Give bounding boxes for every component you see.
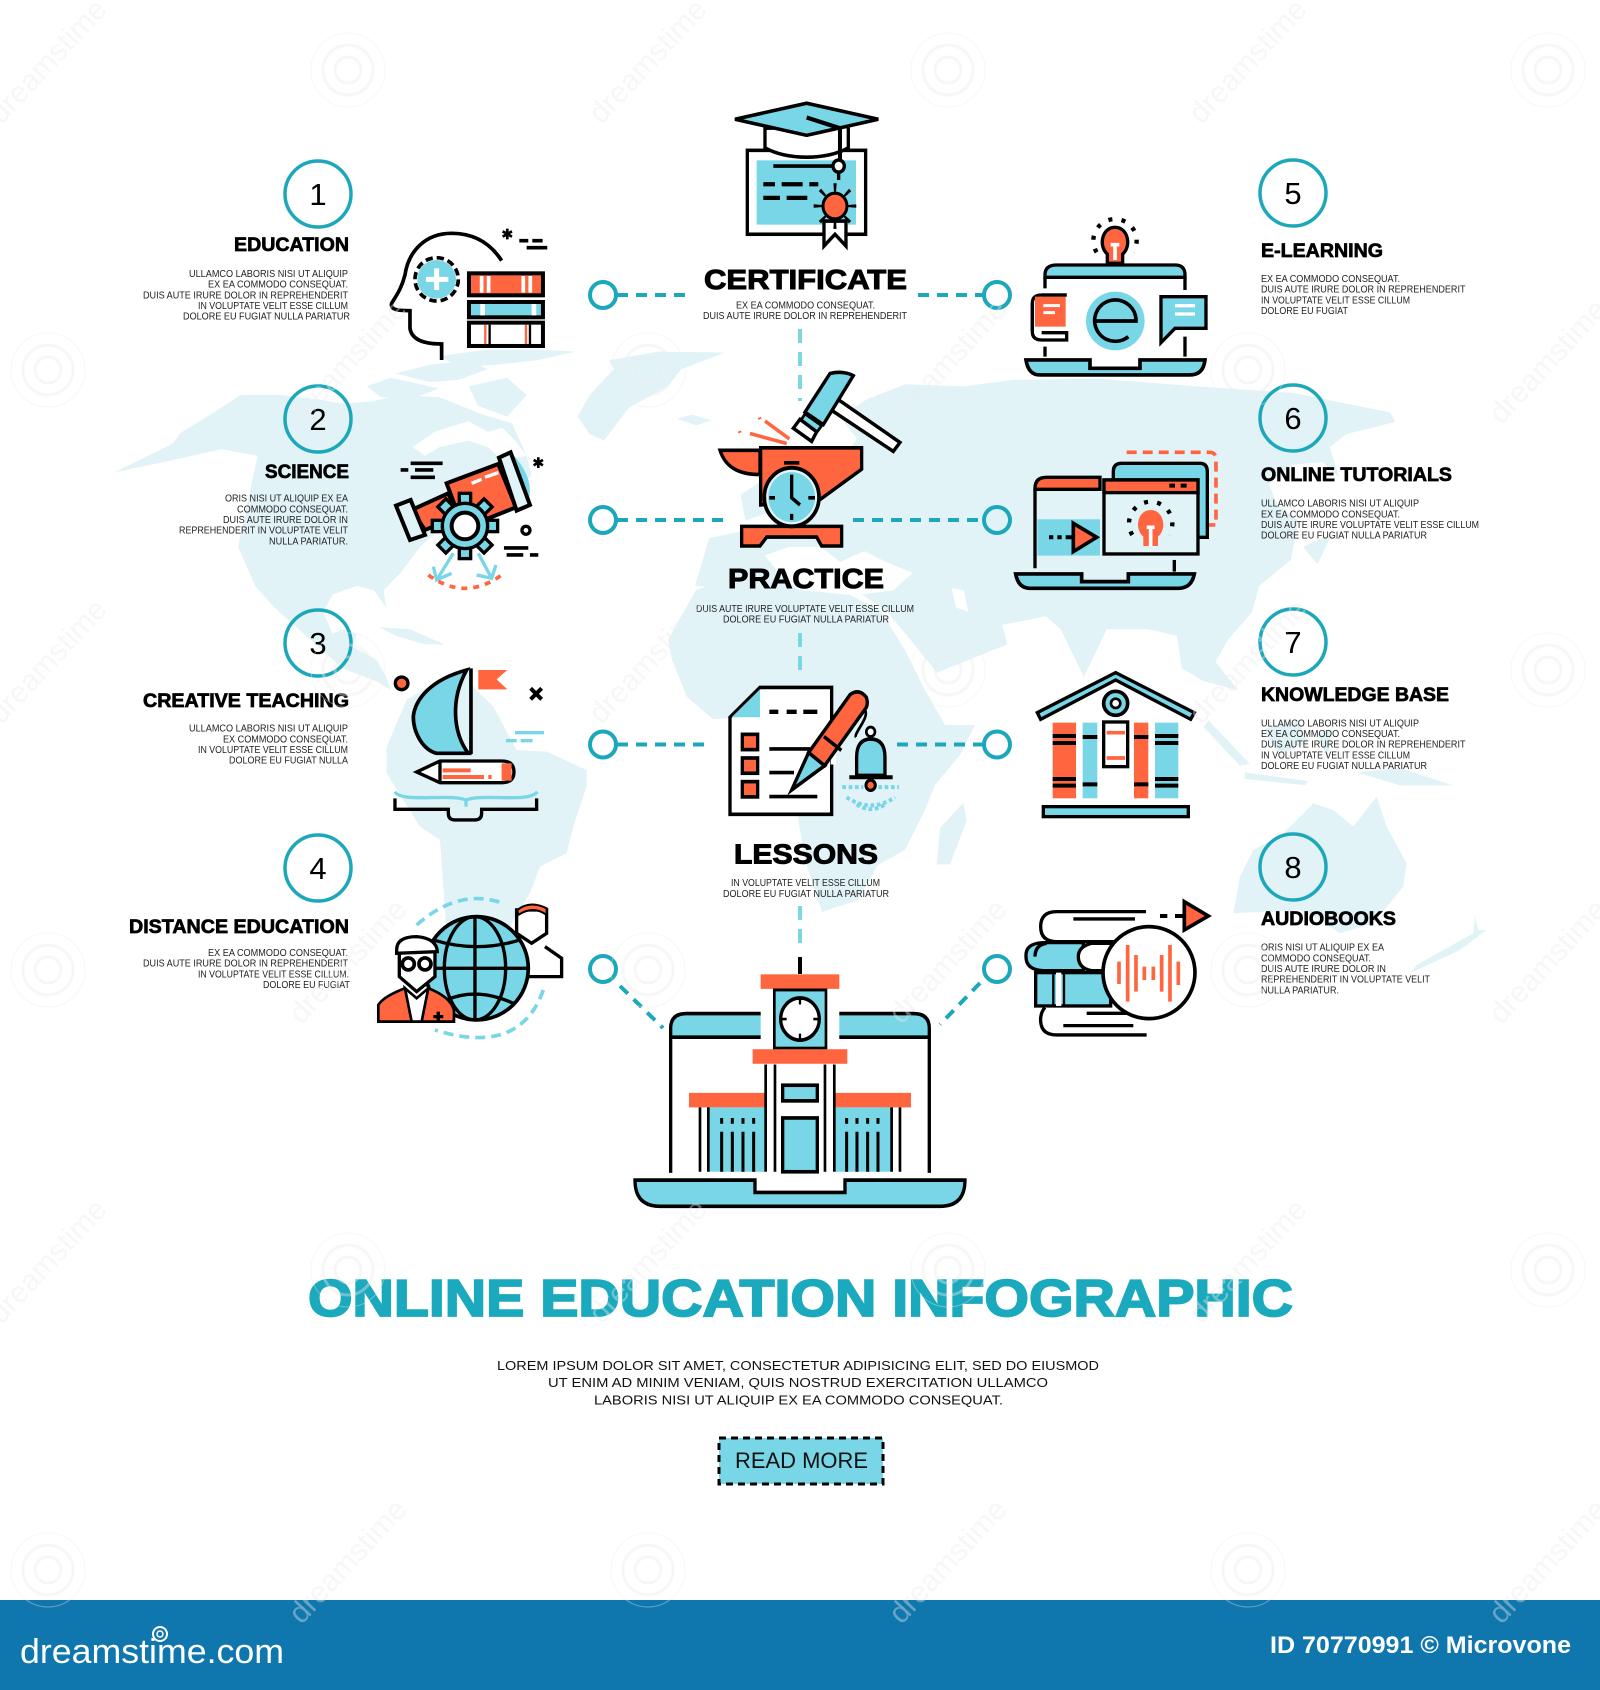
intro paragraph: UT ENIM AD MINIM VENIAM, QUIS NOSTRUD EXERCITATION ULLAMCO xyxy=(548,1375,1048,1390)
body text: EX COMMODO CONSEQUAT. xyxy=(223,733,348,745)
number badge 5 xyxy=(1260,160,1326,226)
body text: EX EA COMMODO CONSEQUAT. xyxy=(208,279,348,291)
icon: sailboat pencil and book xyxy=(395,668,544,820)
text: dreamstime xyxy=(1183,593,1314,730)
number badge 2: 2 xyxy=(309,402,327,437)
text: dreamstime xyxy=(883,293,1014,430)
body text xyxy=(1261,717,1466,772)
body text: ULLAMCO LABORIS NISI UT ALIQUIP xyxy=(1261,498,1419,510)
body text: REPREHENDERIT IN VOLUPTATE VELIT xyxy=(1261,974,1430,986)
icon: telescope and gear xyxy=(396,452,543,588)
center: practice xyxy=(696,372,914,626)
body text: IN VOLUPTATE VELIT ESSE CILLUM xyxy=(1261,294,1410,306)
heading: lessons: LESSONS xyxy=(734,838,878,870)
text: dreamstime xyxy=(883,893,1014,1030)
step 2: science xyxy=(179,386,543,588)
step 1: education xyxy=(143,161,547,360)
world map background xyxy=(115,350,1487,1000)
heading: distance education: DISTANCE EDUCATION xyxy=(129,917,349,938)
body text xyxy=(189,723,348,767)
number badge 6: 6 xyxy=(1284,401,1302,436)
intro paragraph: LABORIS NISI UT ALIQUIP EX EA COMMODO CONSEQUAT. xyxy=(594,1392,1003,1408)
body text: ULLAMCO LABORIS NISI UT ALIQUIP xyxy=(189,268,348,280)
body text: DUIS AUTE IRURE DOLOR IN xyxy=(223,514,348,526)
heading: science: SCIENCE xyxy=(265,462,349,483)
heading: knowledge base: KNOWLEDGE BASE xyxy=(1261,685,1449,706)
step 4: distance education xyxy=(129,835,562,1038)
body text: DOLORE EU FUGIAT xyxy=(263,979,350,991)
icon: globe with two people xyxy=(378,899,562,1038)
body text: ULLAMCO LABORIS NISI UT ALIQUIP xyxy=(1261,717,1419,729)
body text: DOLORE EU FUGIAT NULLA PARIATUR xyxy=(1261,530,1427,542)
body text: REPREHENDERIT IN VOLUPTATE VELIT xyxy=(179,525,348,537)
body text: IN VOLUPTATE VELIT ESSE CILLUM xyxy=(731,877,880,889)
number badge 3: 3 xyxy=(309,626,327,661)
text: dreamstime xyxy=(283,293,414,430)
text: dreamstime xyxy=(883,1493,1014,1630)
heading: practice: PRACTICE xyxy=(728,563,884,594)
body text: DUIS AUTE IRURE VOLUPTATE VELIT ESSE CILLUM xyxy=(696,603,914,615)
body text: COMMODO CONSEQUAT. xyxy=(237,503,348,515)
text: dreamstime xyxy=(1183,1193,1314,1330)
body text: EX EA COMMODO CONSEQUAT. xyxy=(1261,273,1400,285)
body text: NULLA PARIATUR. xyxy=(269,535,348,547)
heading: certificate: CERTIFICATE xyxy=(704,264,907,295)
body text: ULLAMCO LABORIS NISI UT ALIQUIP xyxy=(189,723,348,735)
heading: education: EDUCATION xyxy=(234,235,349,256)
body text xyxy=(723,877,889,900)
body text: DOLORE EU FUGIAT NULLA xyxy=(229,755,348,767)
icon: head with books xyxy=(391,229,547,360)
body text: IN VOLUPTATE VELIT ESSE CILLUM xyxy=(198,744,348,756)
body text xyxy=(696,603,914,626)
body text: DUIS AUTE IRURE DOLOR IN REPREHENDERIT xyxy=(1261,739,1466,751)
text: dreamstime xyxy=(583,1193,714,1330)
intro paragraph xyxy=(497,1358,1099,1408)
body text: DUIS AUTE IRURE DOLOR IN REPREHENDERIT xyxy=(143,289,349,301)
footer logo: dreamstime.com xyxy=(20,1633,284,1671)
body text: EX EA COMMODO CONSEQUAT. xyxy=(736,300,875,312)
icon: graduation cap and diploma xyxy=(735,103,878,246)
step 8: audiobooks xyxy=(1026,834,1430,1035)
number badge 7: 7 xyxy=(1284,625,1302,660)
body text: DUIS AUTE IRURE DOLOR IN REPREHENDERIT xyxy=(703,310,908,322)
step 3: creative teaching xyxy=(143,610,544,820)
body text: COMMODO CONSEQUAT. xyxy=(1261,952,1371,964)
icon: laptop with e-learning symbol xyxy=(1026,219,1206,375)
body text: DUIS AUTE IRURE DOLOR IN xyxy=(1261,963,1386,975)
text: dreamstime xyxy=(283,893,414,1030)
connector lines xyxy=(590,282,1010,1028)
center: certificate xyxy=(703,103,908,322)
body text: EX EA COMMODO CONSEQUAT. xyxy=(1261,728,1400,740)
body text: NULLA PARIATUR. xyxy=(1261,984,1339,996)
step 7: knowledge base xyxy=(1037,609,1466,817)
body text: DOLORE EU FUGIAT NULLA PARIATUR xyxy=(183,311,350,323)
step 6: online tutorials xyxy=(1016,385,1479,588)
number badge 4: 4 xyxy=(309,851,327,886)
body text xyxy=(1261,498,1479,542)
number badge 2 xyxy=(285,386,351,452)
body text: ORIS NISI UT ALIQUIP EX EA xyxy=(225,493,348,505)
body text xyxy=(143,268,350,323)
body text xyxy=(703,300,908,322)
heading: online tutorials: ONLINE TUTORIALS xyxy=(1261,465,1452,486)
heading: e-learning: E-LEARNING xyxy=(1261,241,1383,262)
body text xyxy=(1261,942,1430,996)
number badge 5: 5 xyxy=(1284,176,1302,211)
body text: DOLORE EU FUGIAT NULLA PARIATUR xyxy=(1261,760,1427,772)
read more button: READ MORE xyxy=(735,1448,868,1473)
heading: audiobooks: AUDIOBOOKS xyxy=(1261,909,1396,930)
text: dreamstime xyxy=(283,1493,414,1630)
body text xyxy=(179,493,348,547)
body text: DOLORE EU FUGIAT NULLA PARIATUR xyxy=(723,614,889,626)
icon: books with audio wave xyxy=(1026,902,1208,1035)
central icon: school building on laptop xyxy=(635,974,965,1206)
number badge 1 xyxy=(285,161,351,227)
number badge 8: 8 xyxy=(1284,850,1302,885)
body text: EX EA COMMODO CONSEQUAT. xyxy=(1261,508,1400,520)
icon: anvil hammer and clock xyxy=(720,372,900,546)
number badge 6 xyxy=(1260,385,1326,451)
body text xyxy=(143,947,350,991)
number badge 3 xyxy=(285,610,351,676)
body text: DOLORE EU FUGIAT xyxy=(1261,305,1348,317)
icon: laptop with tutorial windows xyxy=(1016,452,1216,588)
number badge 8 xyxy=(1260,834,1326,900)
title: ONLINE EDUCATION INFOGRAPHIC xyxy=(308,1270,1293,1328)
number badge 7 xyxy=(1260,609,1326,675)
body text: IN VOLUPTATE VELIT ESSE CILLUM xyxy=(198,300,348,312)
step 5: e-learning xyxy=(1026,160,1466,375)
body text xyxy=(1261,273,1466,317)
text: dreamstime xyxy=(583,593,714,730)
number badge 1: 1 xyxy=(309,177,327,212)
body text: DUIS AUTE IRURE VOLUPTATE VELIT ESSE CILLUM xyxy=(1261,519,1479,531)
heading: creative teaching: CREATIVE TEACHING xyxy=(143,691,349,712)
footer bar xyxy=(0,1600,1600,1690)
icon: library of books xyxy=(1037,673,1194,817)
center: lessons xyxy=(723,687,899,900)
number badge 4 xyxy=(285,835,351,901)
body text: DUIS AUTE IRURE DOLOR IN REPREHENDERIT xyxy=(1261,284,1466,296)
read more button xyxy=(719,1438,883,1484)
body text: IN VOLUPTATE VELIT ESSE CILLUM xyxy=(1261,749,1410,761)
image id and credit: ID 70770991 © Microvone xyxy=(1270,1632,1571,1659)
body text: DUIS AUTE IRURE DOLOR IN REPREHENDERIT xyxy=(143,958,349,970)
body text: ORIS NISI UT ALIQUIP EX EA xyxy=(1261,942,1384,954)
icon: checklist pen and bell xyxy=(730,687,899,814)
intro paragraph: LOREM IPSUM DOLOR SIT AMET, CONSECTETUR ADIPISICING ELIT, SED DO EIUSMOD xyxy=(497,1358,1099,1373)
body text: DOLORE EU FUGIAT NULLA PARIATUR xyxy=(723,888,889,900)
body text: EX EA COMMODO CONSEQUAT. xyxy=(208,947,348,959)
body text: IN VOLUPTATE VELIT ESSE CILLUM. xyxy=(198,968,349,980)
